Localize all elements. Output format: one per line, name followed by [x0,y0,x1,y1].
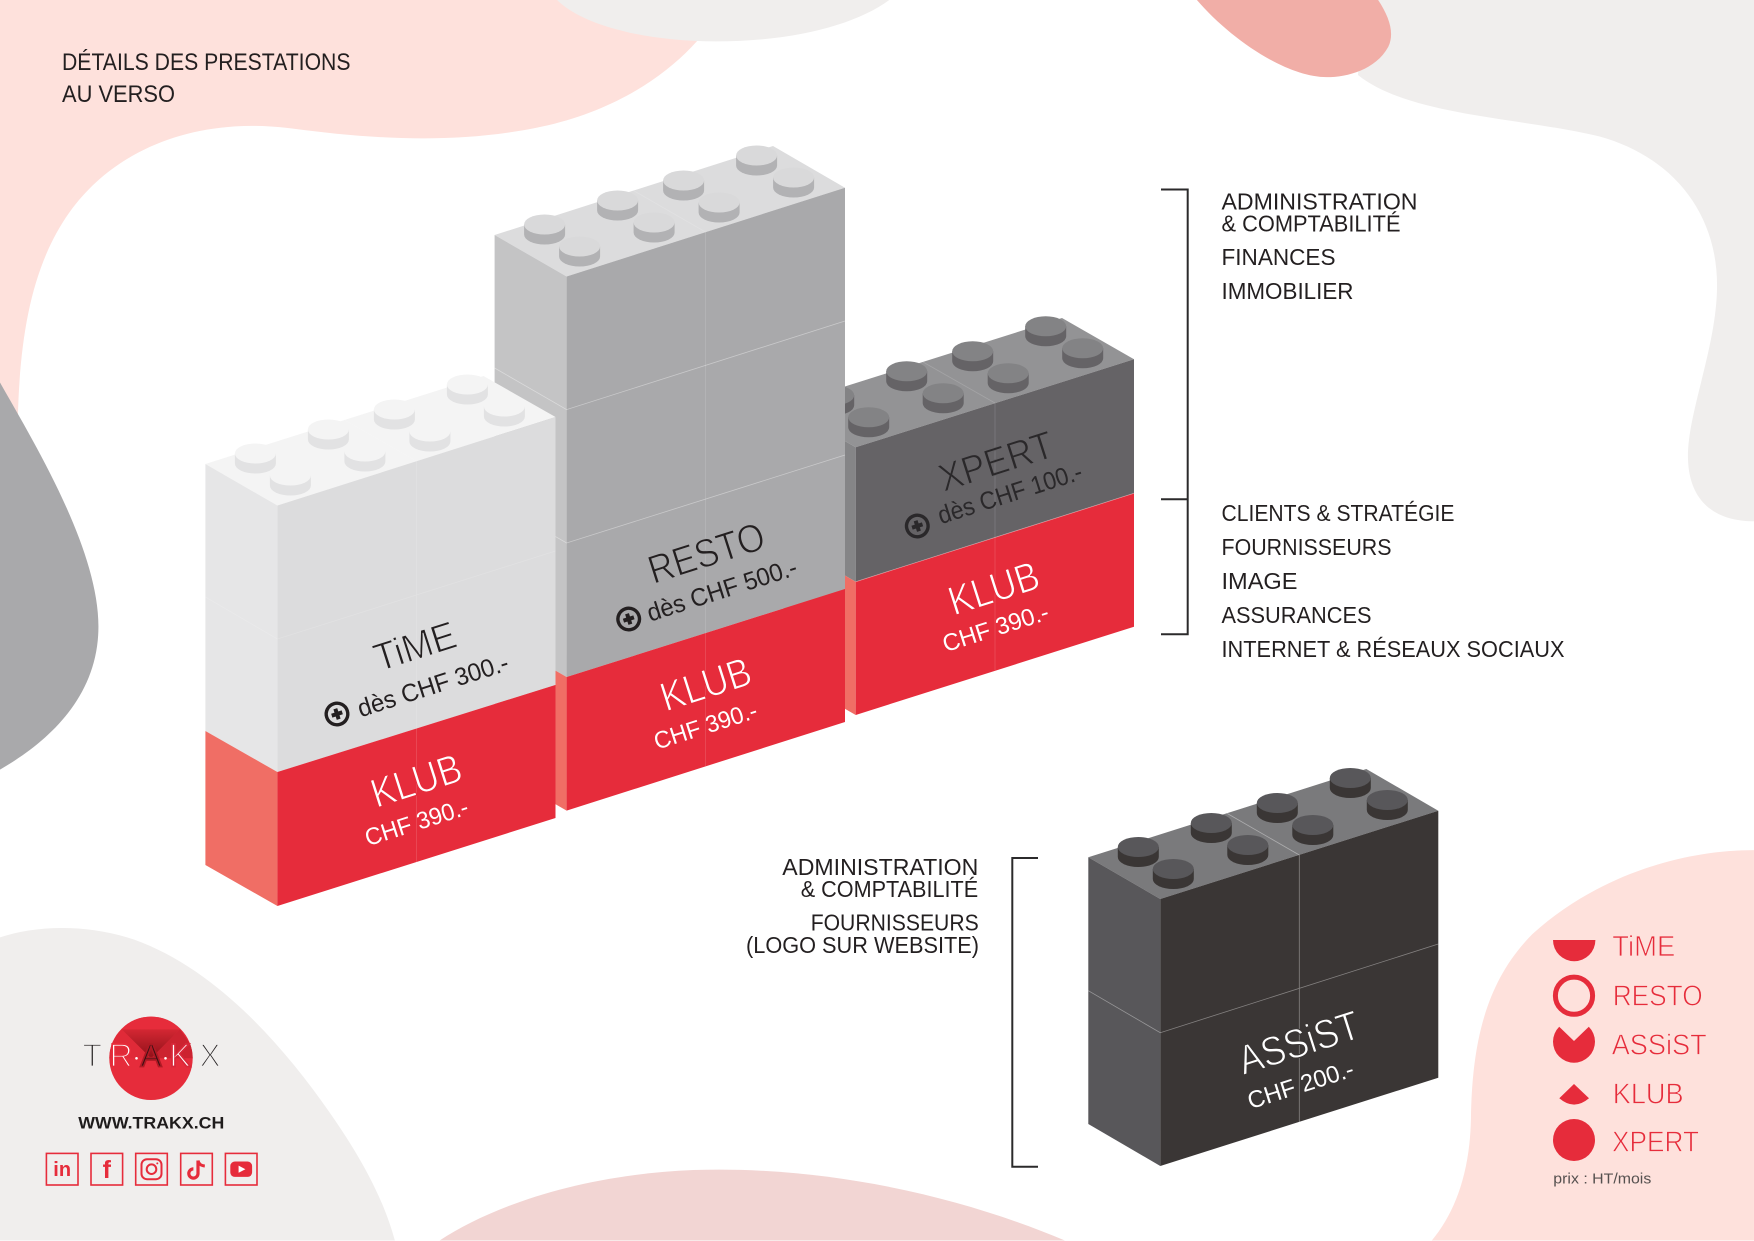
brick label: KLUB price [651,648,761,755]
list: services group one: & COMPTABILITÉ [1222,211,1400,237]
legend icon: XPERT disc [1553,1119,1595,1161]
brick label: TIME [323,614,512,728]
brick label: RESTO: dès CHF 500.- [644,553,801,627]
legend label: XPERT: XPERT [1612,1127,1699,1159]
brick label: KLUB price [939,552,1052,658]
brick label: TIME: dès CHF 300.- [354,649,512,723]
icon: LinkedIn: in [53,1159,71,1181]
icon: YouTube [225,1153,257,1185]
list: assist services: (LOGO SUR WEBSITE) [746,932,979,958]
brick stack: RESTO and KLUB [495,146,845,811]
icon: TikTok [181,1153,212,1185]
brick label: XPERT [904,424,1086,540]
note: details au verso [62,49,350,108]
list: services group two: FOURNISSEURS [1222,534,1392,560]
brick label: KLUB price: CHF 390.- [651,697,761,755]
brick label: RESTO [615,514,801,633]
brick label: XPERT: dès CHF 100.- [934,458,1086,530]
icon: Instagram [136,1153,167,1185]
legend note: price unit: prix : HT/mois [1553,1170,1651,1187]
legend icon: RESTO ring [1555,977,1593,1014]
logo: TRAKX: X [199,1038,221,1074]
brick label: KLUB price: KLUB [942,552,1045,624]
list: services group two: ASSURANCES [1222,602,1372,628]
list: services group one [1222,188,1418,304]
list: assist services: FOURNISSEURS [811,910,979,936]
list: services group two: IMAGE [1222,568,1298,594]
brick label: KLUB price: CHF 390.- [362,794,472,852]
legend icon: KLUB sector [1559,1084,1589,1105]
logo: TRAKX [83,1015,221,1100]
brick label: XPERT: XPERT [933,424,1059,501]
list: services group one: IMMOBILIER [1222,278,1354,304]
list: services group two: INTERNET & RÉSEAUX SOCIAUX [1222,636,1565,662]
brick label: KLUB price: CHF 390.- [939,599,1052,658]
brick label: ASSIST price: ASSiST [1232,1002,1365,1084]
brick label: RESTO: RESTO [643,514,770,593]
brick stack: TIME and KLUB [205,374,556,906]
legend label: RESTO: RESTO [1613,981,1703,1013]
list: assist services: ADMINISTRATION [782,854,978,880]
brick stack: XPERT and KLUB [784,316,1134,715]
note: details au verso: DÉTAILS DES PRESTATIONS [62,49,350,76]
legend [1553,931,1707,1187]
brick stack: ASSIST [1088,768,1438,1166]
brick label: TIME: TiME [369,614,462,680]
list: services group one: FINANCES [1222,244,1336,270]
legend icon: ASSIST notched disc [1553,1027,1595,1063]
legend icon: TIME half disc [1553,940,1595,961]
note: details au verso: AU VERSO [62,81,175,108]
icon: LinkedIn [46,1153,78,1185]
social icons [46,1153,257,1185]
list: services group one: ADMINISTRATION [1222,188,1418,214]
brick label: ASSIST price: CHF 200.- [1244,1056,1357,1115]
legend label: TIME: TiME [1612,931,1675,963]
brick label: KLUB price: KLUB [365,745,468,817]
logo: TRAKX: K [169,1038,191,1074]
bracket: services right [1161,190,1188,634]
icon: Facebook: f [103,1156,112,1184]
list: assist services [746,854,979,958]
website url: WWW.TRAKX.CH [78,1113,224,1132]
legend label: ASSIST: ASSiST [1612,1029,1707,1061]
list: services group two [1222,500,1565,662]
icon: Facebook [91,1153,123,1185]
brick label: KLUB price [362,745,472,852]
logo: TRAKX: T [83,1038,102,1074]
brick label: ASSIST price [1232,1002,1365,1115]
brick label: KLUB price: KLUB [654,648,757,720]
logo: TRAKX: R [109,1038,133,1074]
bracket: assist services [1012,858,1038,1167]
logo: TRAKX: A [140,1038,162,1074]
legend label: KLUB: KLUB [1613,1078,1684,1110]
list: services group two: CLIENTS & STRATÉGIE [1222,500,1454,526]
list: assist services: & COMPTABILITÉ [801,876,978,902]
